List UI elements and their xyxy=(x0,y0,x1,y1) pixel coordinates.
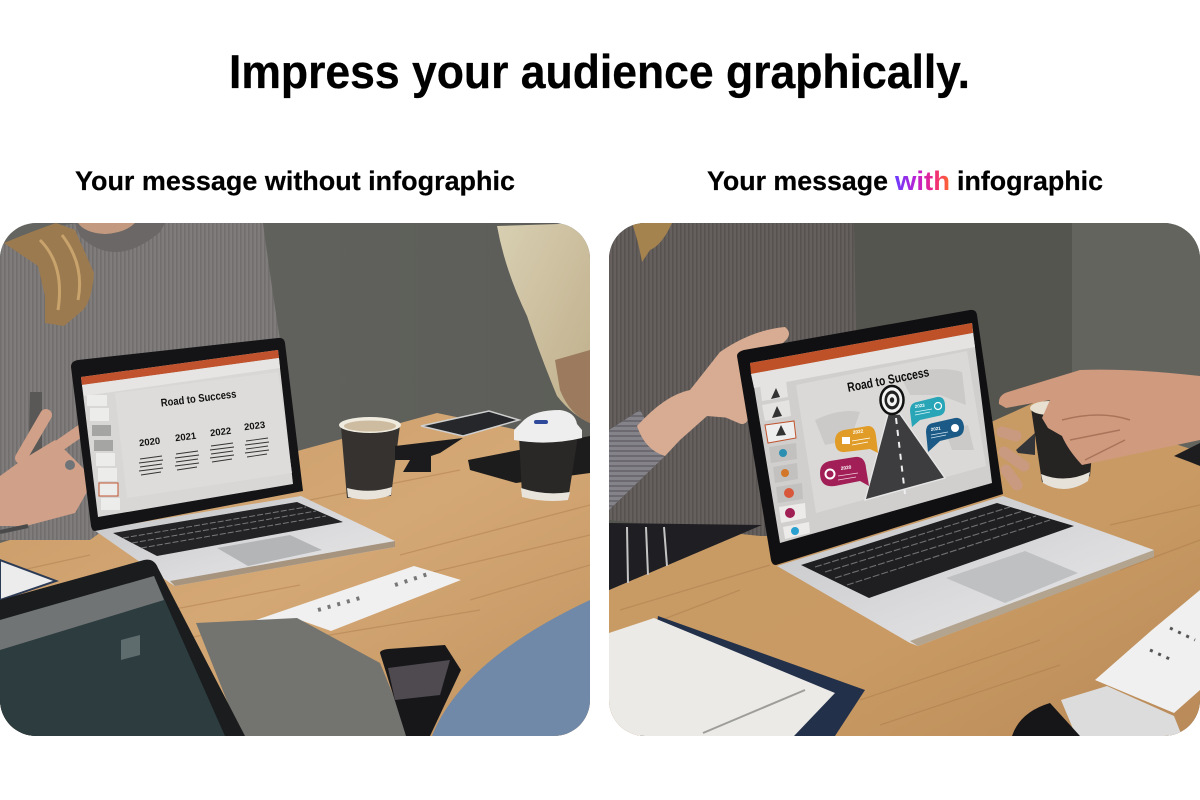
laptop without infographic: Road to Success xyxy=(160,388,237,410)
world map xyxy=(815,369,974,450)
heading: without infographic: Your message without infographic xyxy=(75,166,515,196)
laptop without infographic: 2022 xyxy=(210,426,232,439)
laptop without infographic: 2023 xyxy=(244,420,266,433)
slide xyxy=(796,351,986,513)
person in grey sweater xyxy=(0,223,282,540)
thumbnails xyxy=(87,395,120,510)
pointing hand xyxy=(999,370,1200,466)
heading: with infographic xyxy=(707,166,1103,196)
target icon xyxy=(880,386,904,414)
phone on table xyxy=(421,411,519,436)
foreground laptop xyxy=(0,560,245,736)
bubble 2023 xyxy=(910,397,945,427)
phone xyxy=(1016,433,1035,455)
phone in hand xyxy=(380,645,461,736)
tablet xyxy=(196,618,410,736)
laptop without infographic: 2020 xyxy=(139,436,161,449)
presenter fingers behind laptop xyxy=(1002,432,1024,485)
coffee cup xyxy=(339,417,401,500)
bubble 2020 xyxy=(820,457,869,486)
heading: with infographic: infographic xyxy=(957,166,1103,196)
laptop lid xyxy=(71,338,303,531)
bubble 2023: 2023 xyxy=(914,403,926,409)
laptop base xyxy=(94,496,395,586)
laptop without infographic xyxy=(71,338,395,586)
blue sleeve xyxy=(432,600,590,736)
road xyxy=(865,414,945,500)
bubble 2022 xyxy=(835,426,878,453)
wallet xyxy=(468,436,590,483)
black cup xyxy=(1030,401,1095,489)
notebook xyxy=(609,616,865,736)
thumbnails xyxy=(760,381,810,539)
title: Impress your audience graphically. xyxy=(229,45,970,98)
hand xyxy=(0,415,88,532)
paper xyxy=(0,560,56,600)
bubble 2021 xyxy=(926,418,964,452)
panel: photo with infographic xyxy=(609,223,1200,736)
person in grey sweater xyxy=(609,223,858,590)
bubble 2020: 2020 xyxy=(840,465,852,472)
heading: with infographic: Your message xyxy=(707,166,888,196)
laptop without infographic: 2021 xyxy=(175,431,198,444)
power socket xyxy=(1061,590,1200,736)
slide title: Road to Success xyxy=(846,364,930,395)
presenter left hand xyxy=(637,327,789,456)
dark object xyxy=(1012,703,1080,736)
bubble 2022: 2022 xyxy=(852,429,864,436)
laptop with infographic xyxy=(737,310,1154,646)
slide xyxy=(290,456,292,473)
takeaway cup xyxy=(514,410,582,501)
blond head xyxy=(497,223,590,423)
power socket xyxy=(256,566,461,631)
laptop base xyxy=(777,496,1154,646)
laptop lid xyxy=(737,310,1003,565)
panel: photo without infographic xyxy=(0,223,590,736)
heading: with infographic: with xyxy=(894,166,950,196)
phone stand xyxy=(395,438,463,472)
bubble 2021: 2021 xyxy=(930,426,942,432)
